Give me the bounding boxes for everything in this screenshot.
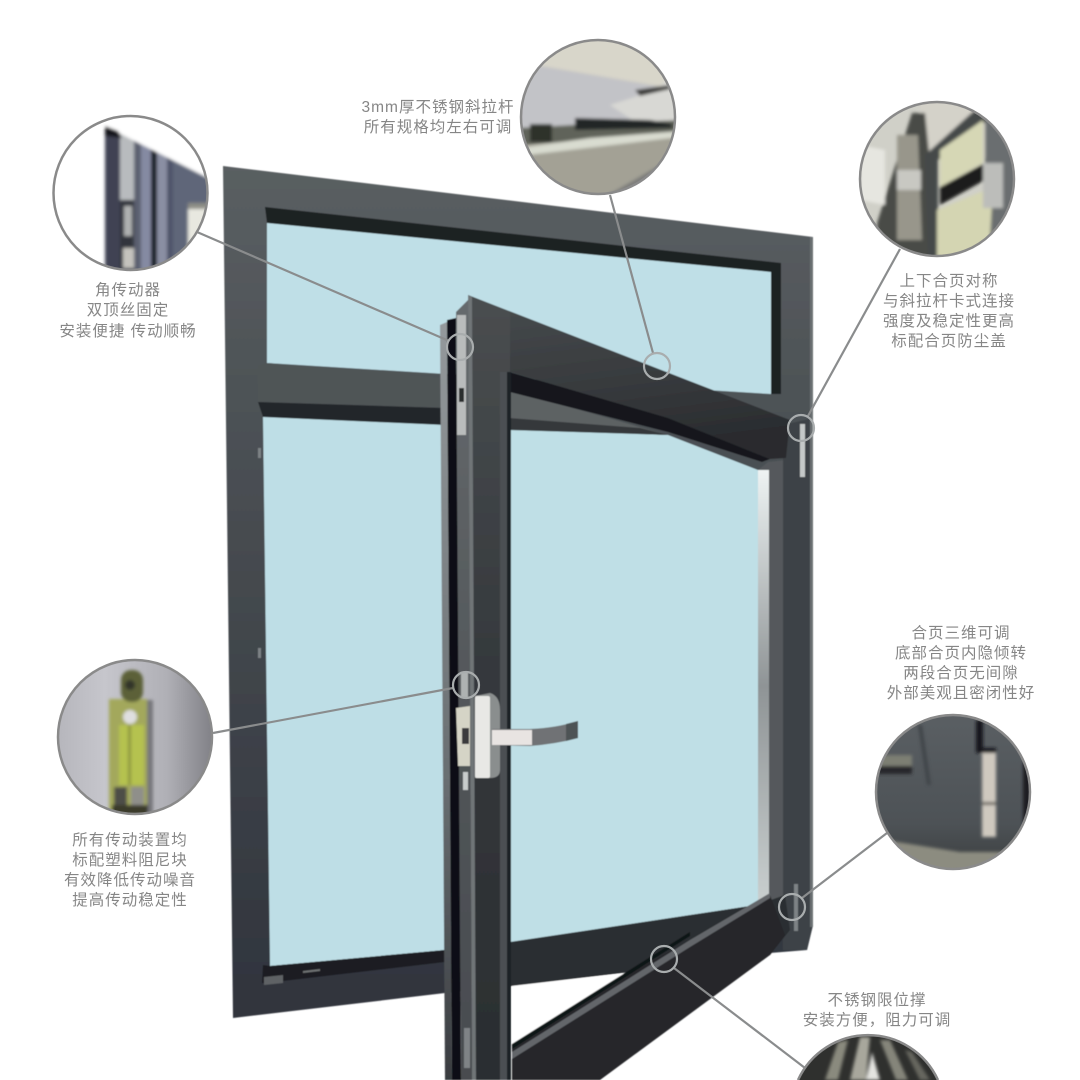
icon: damping block detail photo [58,660,213,815]
text: damping block: 所有传动装置均 [72,831,188,849]
text: hinges: 标配合页防尘盖 [891,332,1007,350]
icon: stay arm detail photo [520,30,680,200]
left edge of sash profile [440,322,452,1080]
text: hinges [883,272,1015,350]
lower rabbet [266,950,445,983]
text: stay arm [362,98,514,136]
icon: corner drive detail photo [53,110,215,275]
white gap beneath the frame [512,973,630,1047]
transom glass [267,223,771,394]
locking hardware strip [457,315,466,435]
right frame [783,418,813,950]
left lower glass [263,417,445,966]
text: corner drive: 安装便捷 传动顺畅 [59,322,197,340]
text: limit stay [803,991,951,1029]
leader line: corner drive [197,232,473,360]
text: damping block: 有效降低传动噪音 [64,871,196,889]
text: corner drive: 角传动器 [95,281,161,299]
glass seen through the open sash [510,428,768,942]
text: hinges: 强度及稳定性更高 [883,312,1015,330]
icon: hinge detail photo [860,98,1020,260]
sash bottom frame section [445,895,790,993]
text: stay arm: 所有规格均左右可调 [364,118,512,136]
text: stay arm: 3mm厚不锈钢斜拉杆 [362,98,514,116]
icon: concealed hinge detail photo [876,715,1031,875]
icon: limit stay detail photo [798,1035,938,1080]
outer fixed frame [223,166,813,1018]
text: damping block [64,831,196,909]
text: limit stay: 安装方便，阻力可调 [803,1011,951,1029]
leader line: damping block [213,672,479,733]
text: concealed hinge: 两段合页无间隙 [903,664,1019,682]
sash bottom rail [512,895,785,1080]
text: hinges: 上下合页对称 [899,272,999,290]
sash stile [468,295,510,1080]
sash top rail [468,295,790,459]
text: damping block: 提高传动稳定性 [72,891,188,909]
text: limit stay: 不锈钢限位撑 [827,991,927,1009]
text: hinges: 与斜拉杆卡式连接 [883,292,1015,310]
leader line: bottom hinge [779,833,887,920]
text: concealed hinge: 外部美观且密闭性好 [887,684,1035,702]
mullion seen through sash [509,390,668,435]
text: concealed hinge: 合页三维可调 [911,624,1011,642]
text: corner drive [59,281,197,340]
leader line: limit stay [651,946,805,1068]
text: concealed hinge [887,624,1035,702]
text: corner drive: 双顶丝固定 [87,301,169,319]
right inner jamb [758,460,786,905]
handle assembly [456,706,470,766]
leader line: stay arm [610,195,670,379]
hinge pins [800,424,805,477]
hardware dots on the frame [258,448,261,458]
text: concealed hinge: 底部合页内隐倾转 [895,644,1027,662]
leader line: top hinge [788,249,900,441]
window illustration [223,166,813,1080]
text: damping block: 标配塑料阻尼块 [72,851,188,869]
mullion [258,363,445,408]
transom rabbet shadow [265,207,781,394]
